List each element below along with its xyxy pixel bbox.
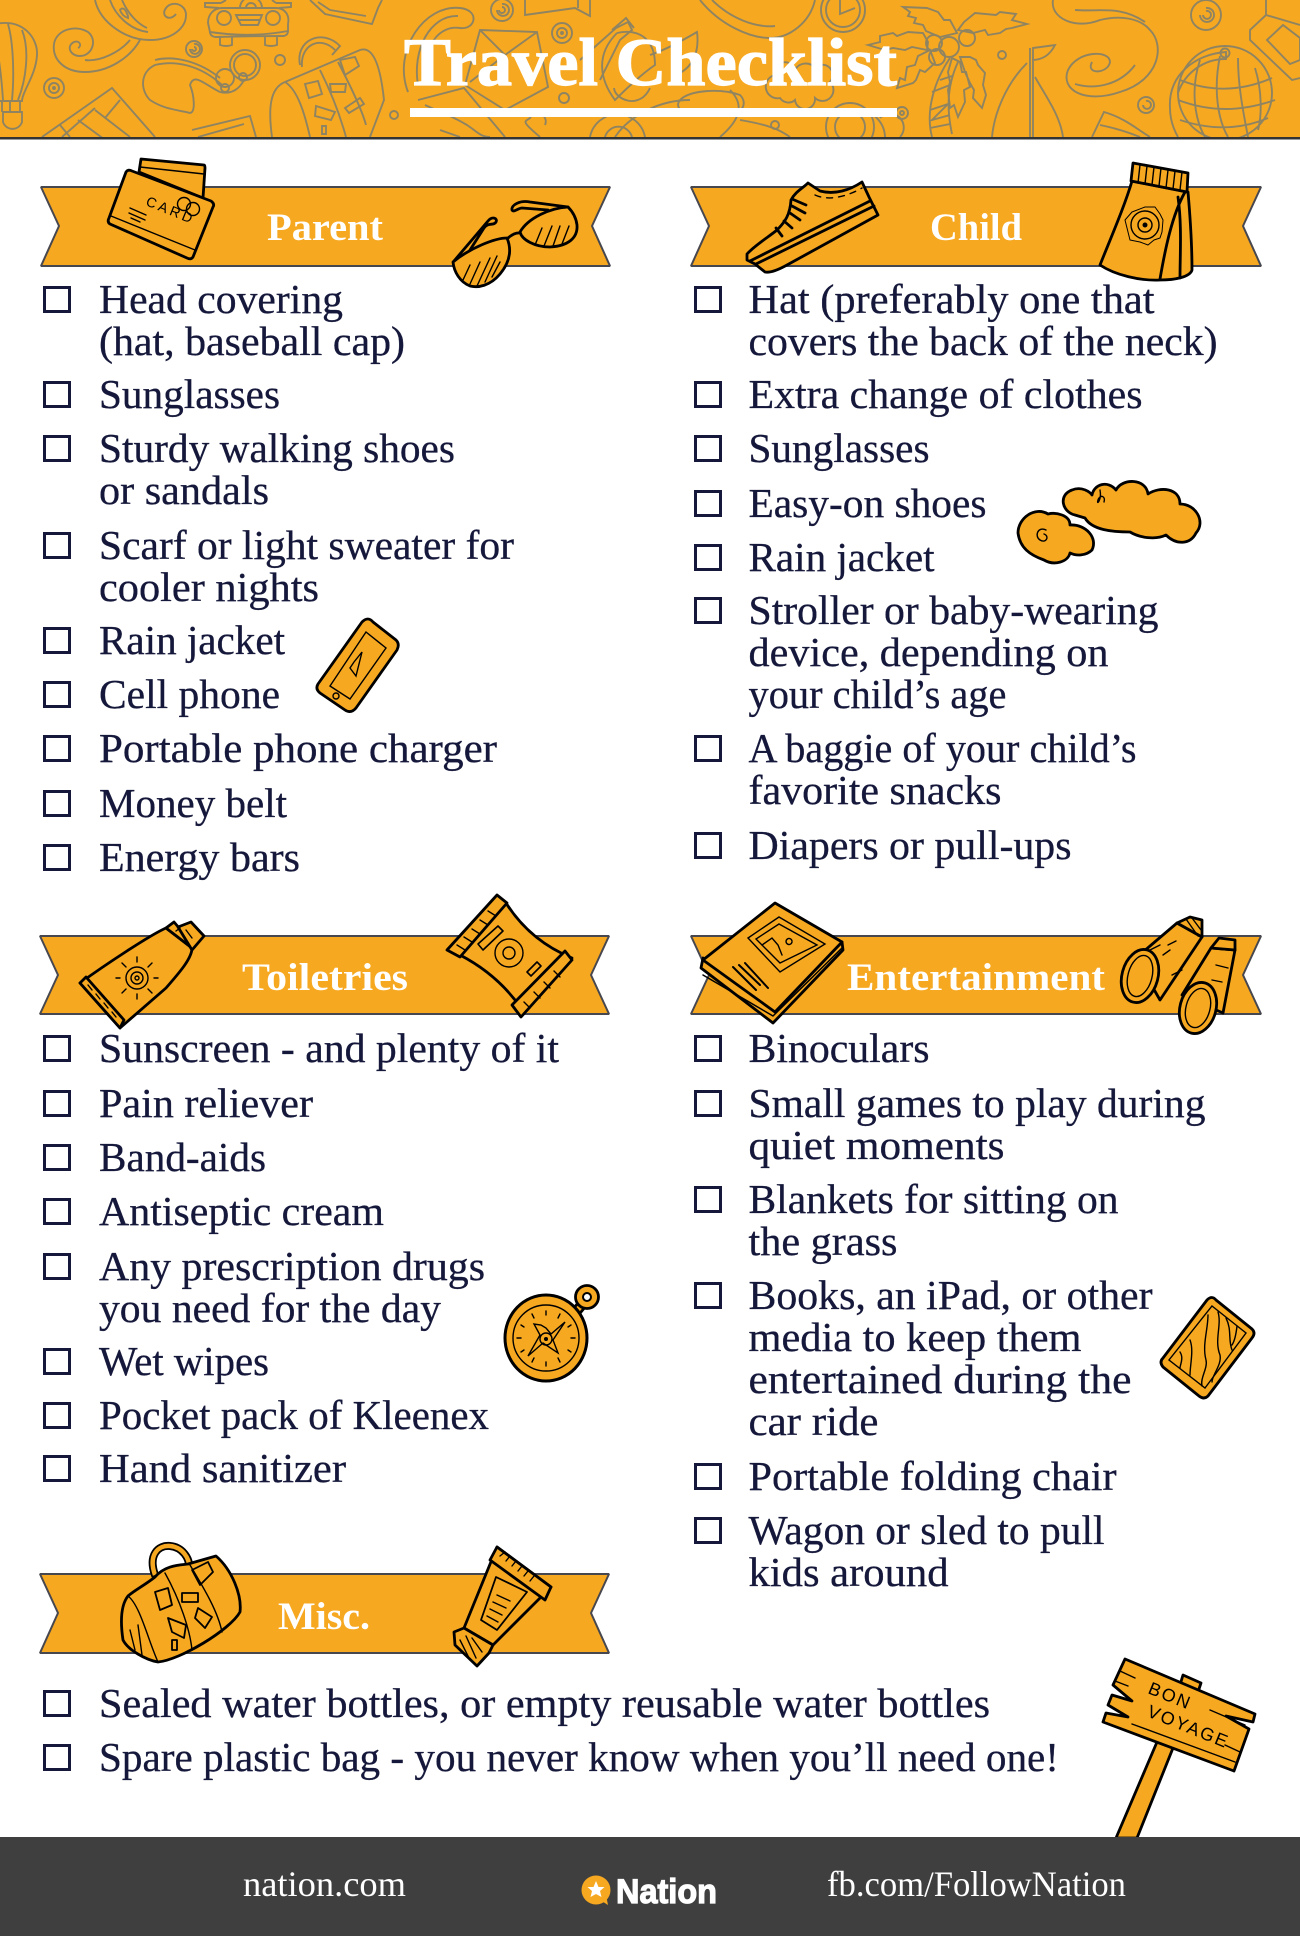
item: money belt: Money belt: [99, 780, 288, 826]
item: walking shoes: [44, 425, 455, 513]
item: hand sanitizer: Hand sanitizer: [99, 1445, 346, 1491]
item: small games: Small games to play during: [748, 1080, 1206, 1126]
item: stroller: device, depending on: [748, 629, 1108, 675]
checklist: toiletries: [44, 1025, 560, 1491]
footer link: facebook: fb.com/FollowNation: [827, 1864, 1126, 1904]
panel: toiletries: [40, 895, 609, 1491]
footer link: website: nation.com: [243, 1864, 406, 1904]
icon: sunglasses: [453, 202, 577, 287]
title: Travel Checklist: [404, 24, 897, 100]
item: wagon: kids around: [748, 1549, 948, 1595]
item: sunglasses: Sunglasses: [99, 371, 280, 417]
item: hat: [696, 276, 1218, 364]
item: rain jacket: Rain jacket: [99, 617, 286, 663]
item: books: Books, an iPad, or other: [748, 1272, 1153, 1318]
banner: child: [691, 187, 1261, 266]
item: wagon: Wagon or sled to pull: [748, 1507, 1104, 1553]
header band: [0, 0, 1300, 151]
icon: duffel bag: [121, 1546, 240, 1662]
item: hat: covers the back of the neck): [748, 318, 1218, 364]
item: snacks: favorite snacks: [748, 767, 1002, 813]
item: pain reliever: Pain reliever: [99, 1080, 313, 1126]
footer: [0, 1837, 1300, 1936]
checklist: misc: [44, 1680, 1059, 1780]
logo: Nation: Nation: [616, 1873, 717, 1911]
item: antiseptic cream: Antiseptic cream: [99, 1188, 384, 1234]
icon: book: [701, 903, 843, 1023]
item: books: [696, 1272, 1153, 1444]
item: band-aids: Band-aids: [99, 1134, 266, 1180]
item: plastic bag: Spare plastic bag - you never know when you’ll need one!: [99, 1734, 1059, 1780]
item: head covering: (hat, baseball cap): [99, 318, 405, 364]
icon: shoe: [747, 182, 878, 272]
item: rain jacket: Rain jacket: [748, 534, 935, 580]
icon: lotion tube: [454, 1547, 551, 1666]
item: sunscreen: Sunscreen - and plenty of it: [99, 1025, 560, 1071]
item: energy bars: Energy bars: [99, 834, 300, 880]
item: prescription drugs: you need for the day: [99, 1285, 441, 1331]
item: books: entertained during the: [748, 1356, 1132, 1402]
item: blankets: Blankets for sitting on: [748, 1176, 1118, 1222]
panel: child: [691, 163, 1261, 868]
item: wet wipes: Wet wipes: [99, 1338, 269, 1384]
item: stroller: your child’s age: [748, 671, 1006, 717]
heading: entertainment: Entertainment: [847, 956, 1105, 999]
icon: binoculars: [1116, 917, 1235, 1038]
heading: parent: Parent: [267, 206, 383, 249]
item: cell phone: Cell phone: [99, 671, 280, 717]
item: water bottles: Sealed water bottles, or empty reusable water bottles: [99, 1680, 990, 1726]
item: sunglasses: Sunglasses: [748, 425, 930, 471]
icon: credit card: [108, 159, 214, 259]
item: snacks: [696, 725, 1136, 813]
icon: bon voyage sign: BON: [1146, 1678, 1195, 1714]
icon: snack packet: [447, 895, 572, 1017]
item: walking shoes: Sturdy walking shoes: [99, 425, 455, 471]
checklist: child: [696, 276, 1218, 868]
item: phone charger: Portable phone charger: [99, 725, 497, 771]
item: blankets: the grass: [748, 1218, 898, 1264]
item: stroller: Stroller or baby-wearing: [748, 587, 1158, 633]
item: prescription drugs: [44, 1243, 485, 1331]
icon: compass: [505, 1286, 598, 1381]
item: scarf: Scarf or light sweater for: [99, 522, 514, 568]
icon: bon voyage sign: VOYAGE: [1145, 1701, 1232, 1752]
banner: entertainment: [691, 936, 1261, 1014]
item: blankets: [696, 1176, 1118, 1264]
item: folding chair: Portable folding chair: [748, 1453, 1117, 1499]
banner: parent: [41, 187, 610, 266]
item: prescription drugs: Any prescription drugs: [99, 1243, 485, 1289]
icon: credit card: CARD: [144, 193, 198, 227]
icon: tablet: [1161, 1298, 1254, 1398]
panel: entertainment: [691, 903, 1261, 1595]
item: small games: [696, 1080, 1206, 1168]
panel: misc: [40, 1546, 1059, 1780]
banner: toiletries: [40, 936, 609, 1014]
icon: sunscreen tube: [80, 922, 204, 1028]
item: head covering: [44, 276, 405, 364]
item: snacks: A baggie of your child’s: [748, 725, 1136, 771]
icon: clouds: [1018, 481, 1200, 563]
item: extra clothes: Extra change of clothes: [748, 371, 1142, 417]
item: head covering: Head covering: [99, 276, 343, 322]
item: binoculars: Binoculars: [748, 1025, 930, 1071]
icon: phone: [317, 619, 398, 712]
item: hat: Hat (preferably one that: [748, 276, 1155, 322]
item: walking shoes: or sandals: [99, 467, 269, 513]
panel: parent: [41, 159, 610, 880]
item: scarf: [44, 522, 514, 610]
item: books: car ride: [748, 1398, 878, 1444]
item: kleenex: Pocket pack of Kleenex: [99, 1392, 489, 1438]
checklist: parent: [44, 276, 514, 880]
item: scarf: cooler nights: [99, 564, 319, 610]
item: easy-on shoes: Easy-on shoes: [748, 480, 986, 526]
item: small games: quiet moments: [748, 1122, 1004, 1168]
item: stroller: [696, 587, 1158, 717]
checklist: entertainment: [696, 1025, 1206, 1595]
icon: bon voyage sign: [1103, 1659, 1255, 1838]
icon: snack bag: [1100, 163, 1192, 280]
heading: child: Child: [930, 206, 1022, 249]
item: wagon: [696, 1507, 1104, 1595]
banner: misc: [40, 1574, 609, 1653]
heading: toiletries: Toiletries: [242, 956, 408, 999]
item: books: media to keep them: [748, 1314, 1082, 1360]
item: diapers: Diapers or pull-ups: [748, 822, 1072, 868]
heading: misc: Misc.: [278, 1595, 370, 1638]
